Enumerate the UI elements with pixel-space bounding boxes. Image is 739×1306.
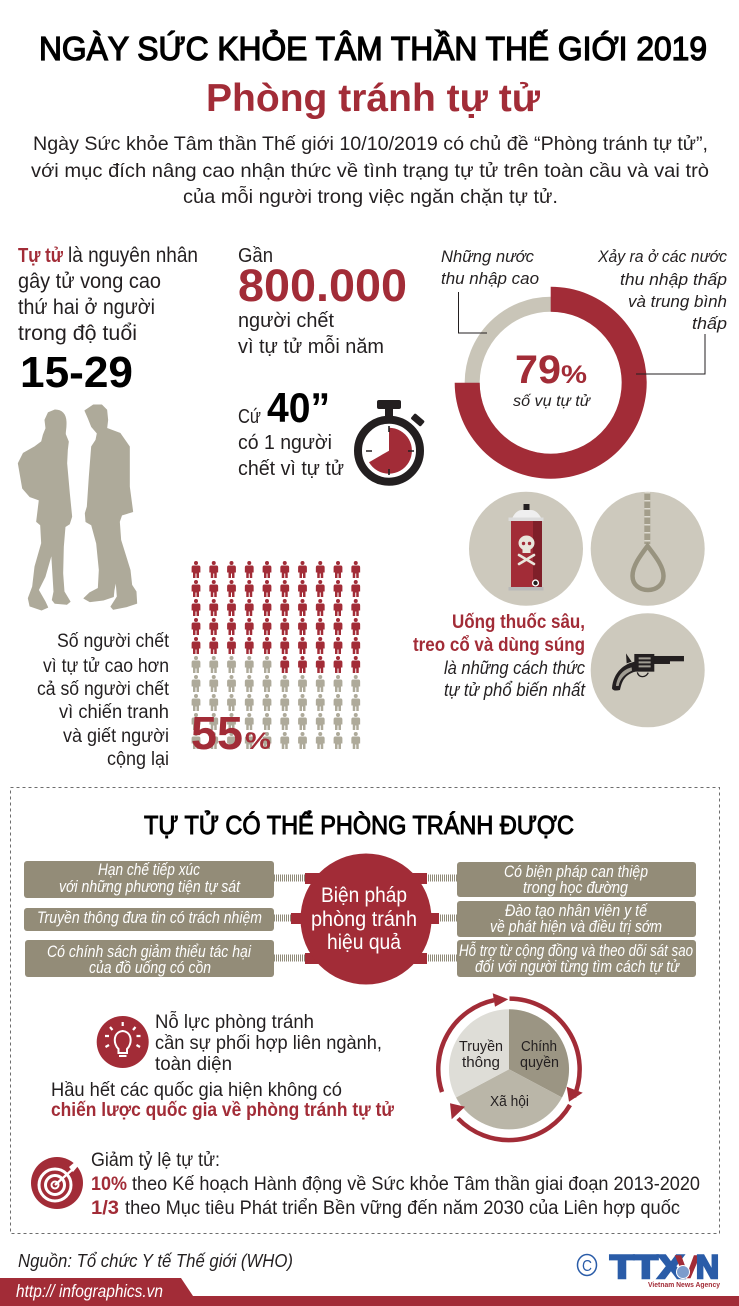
panel: prevention — [10, 788, 720, 1234]
text: age group statement: Tự tử — [18, 245, 63, 267]
chart: donut 79% — [455, 287, 647, 479]
logo: TTXVN: N — [696, 1249, 719, 1285]
chart: donut 79%: số vụ tự tử — [513, 393, 591, 410]
text: common methods — [413, 612, 586, 700]
text: more than war and homicide: cả số người chết — [37, 679, 170, 700]
text: age group statement: là nguyên nhân — [68, 244, 198, 267]
chart: donut 79%: 79 — [515, 348, 561, 392]
text: every 40 seconds — [238, 384, 344, 480]
label: high income countries: thu nhập cao — [441, 269, 539, 288]
footer bar with url — [0, 1278, 739, 1306]
chart: pictogram of 100 people — [192, 561, 360, 749]
icon: stopwatch — [358, 400, 425, 482]
text: age group statement: thứ hai ở người — [18, 296, 155, 319]
text: age group statement: trong độ tuổi — [18, 322, 137, 345]
label: low income countries: Xảy ra ở các nước — [597, 247, 727, 266]
text: national strategy: chiến lược quốc gia về phòng tránh tự tử — [51, 1100, 394, 1121]
logo: TTXVN — [578, 1249, 721, 1289]
label: low income countries: và trung bình — [628, 292, 727, 311]
text: age group statement — [18, 244, 198, 345]
chart: government, media, society cycle — [438, 993, 583, 1140]
diagram: effective measures: hiệu quả — [327, 931, 401, 954]
logo: TTXVN: TTX — [610, 1249, 685, 1285]
text: reduction targets: theo Kế hoạch Hành động về Sức khỏe Tâm thần giai đoạn 2013-2020 — [132, 1174, 700, 1195]
text: multisector effort: cần sự phối hợp liên ngành, — [155, 1033, 382, 1054]
icon: pesticide spray can — [469, 492, 583, 606]
text: common methods: tự tử phổ biến nhất — [444, 680, 586, 700]
diagram: effective measures: Truyền thông đưa tin có trách nhiệm — [37, 909, 262, 927]
label: high income countries — [441, 247, 539, 333]
icon: revolver — [591, 613, 705, 727]
logo: TTXVN: V — [675, 1249, 701, 1285]
text: more than war and homicide: Số người chết — [57, 631, 170, 652]
diagram: effective measures: Biện pháp — [321, 884, 407, 907]
diagram: effective measures: với những phương tiện tự sát — [59, 878, 241, 896]
text: multisector effort: toàn diện — [155, 1054, 232, 1075]
label: low income countries: thu nhập thấp — [620, 270, 727, 289]
logo: TTXVN: C — [582, 1258, 592, 1275]
text: more than war and homicide: vì chiến tranh — [59, 702, 169, 723]
label: low income countries — [597, 247, 727, 374]
text: age group statement: gây tử vong cao — [18, 270, 161, 293]
diagram: effective measures: Hạn chế tiếp xúc — [98, 861, 201, 879]
text: every 40 seconds: có 1 người — [238, 432, 332, 454]
intro paragraph: Ngày Sức khỏe Tâm thần Thế giới 10/10/2019 có chủ đề “Phòng tránh tự tử”, — [33, 133, 708, 155]
title: NGÀY SỨC KHỎE TÂM THẦN THẾ GIỚI 2019 — [39, 30, 707, 68]
text: nearly 800,000 deaths: 800.000 — [238, 260, 407, 311]
text: every 40 seconds: chết vì tự tử — [238, 458, 344, 480]
text: more than war and homicide: vì tự tử cao hơn — [43, 656, 169, 677]
icon: light bulb — [97, 1016, 149, 1068]
chart: donut 79%: % — [561, 361, 587, 389]
text: reduction targets: theo Mục tiêu Phát triển Bền vững đến năm 2030 của Liên hợp quốc — [125, 1198, 680, 1219]
chart: government, media, society cycle: Truyền — [459, 1038, 503, 1055]
diagram: effective measures: đối với người từng tìm cách tự tử — [475, 958, 680, 976]
text: multisector effort: Nỗ lực phòng tránh — [155, 1011, 314, 1033]
text: common methods: treo cổ và dùng súng — [413, 635, 585, 656]
diagram: effective measures: về phát hiện và điều trị sớm — [490, 918, 662, 936]
text: national strategy: Hầu hết các quốc gia hiện không có — [51, 1080, 342, 1101]
text: reduction targets: Giảm tỷ lệ tự tử: — [91, 1150, 220, 1171]
chart: government, media, society cycle: Xã hội — [490, 1093, 529, 1110]
text: every 40 seconds: Cứ — [238, 406, 261, 428]
diagram: effective measures: Có chính sách giảm thiểu tác hại — [47, 943, 252, 961]
number: 55%: 55 — [191, 707, 243, 759]
diagram: effective measures — [24, 854, 696, 984]
text: reduction targets: 1/3 — [91, 1198, 119, 1219]
text: more than war and homicide: và giết người — [63, 726, 169, 747]
text: reduction targets: 10% — [91, 1174, 127, 1195]
text: every 40 seconds: 40” — [267, 384, 330, 431]
heading: suicide is preventable: TỰ TỬ CÓ THỂ PHÒNG TRÁNH ĐƯỢC — [144, 809, 574, 840]
intro paragraph — [31, 133, 709, 208]
chart: government, media, society cycle: Chính — [521, 1038, 557, 1055]
text: nearly 800,000 deaths — [238, 245, 407, 358]
diagram: effective measures: của đồ uống có cồn — [89, 959, 211, 977]
diagram: effective measures: Đào tạo nhân viên y tế — [505, 902, 649, 920]
diagram: effective measures: trong học đường — [523, 879, 629, 897]
diagram: effective measures: phòng tránh — [311, 908, 417, 931]
number: 55% — [191, 707, 271, 759]
text: nearly 800,000 deaths: Gần — [238, 245, 273, 267]
text: more than war and homicide — [37, 631, 170, 770]
chart: government, media, society cycle: thông — [462, 1054, 500, 1071]
chart: government, media, society cycle: quyền — [520, 1054, 559, 1071]
icon: target with arrow — [31, 1157, 83, 1209]
subtitle: Phòng tránh tự tử — [206, 77, 541, 120]
text: national strategy — [51, 1080, 394, 1121]
label: low income countries: thấp — [692, 314, 727, 333]
intro paragraph: với mục đích nâng cao nhận thức về tình trạng tự tử trên toàn cầu và vai trò — [31, 160, 709, 182]
label: high income countries: Những nước — [441, 247, 534, 266]
text: multisector effort — [155, 1011, 382, 1075]
source: Nguồn: Tổ chức Y tế Thế giới (WHO) — [18, 1250, 293, 1271]
intro paragraph: của mỗi người trong việc ngăn chặn tự tử. — [183, 185, 558, 208]
text: nearly 800,000 deaths: vì tự tử mỗi năm — [238, 335, 384, 358]
diagram: effective measures: Có biện pháp can thiệp — [504, 863, 648, 881]
icon: silhouettes of two young people — [18, 405, 137, 610]
text: common methods: là những cách thức — [444, 658, 585, 678]
text: common methods: Uống thuốc sâu, — [452, 612, 585, 633]
text: nearly 800,000 deaths: người chết — [238, 310, 334, 332]
text: reduction targets — [91, 1150, 700, 1219]
number: 15-29: 15-29 — [20, 348, 133, 397]
text: more than war and homicide: cộng lại — [107, 749, 169, 770]
icon: noose — [591, 492, 705, 606]
logo: TTXVN: Vietnam News Agency — [648, 1280, 721, 1289]
number: 55%: % — [245, 728, 271, 755]
footer bar with url: http:// infographics.vn — [16, 1281, 163, 1301]
